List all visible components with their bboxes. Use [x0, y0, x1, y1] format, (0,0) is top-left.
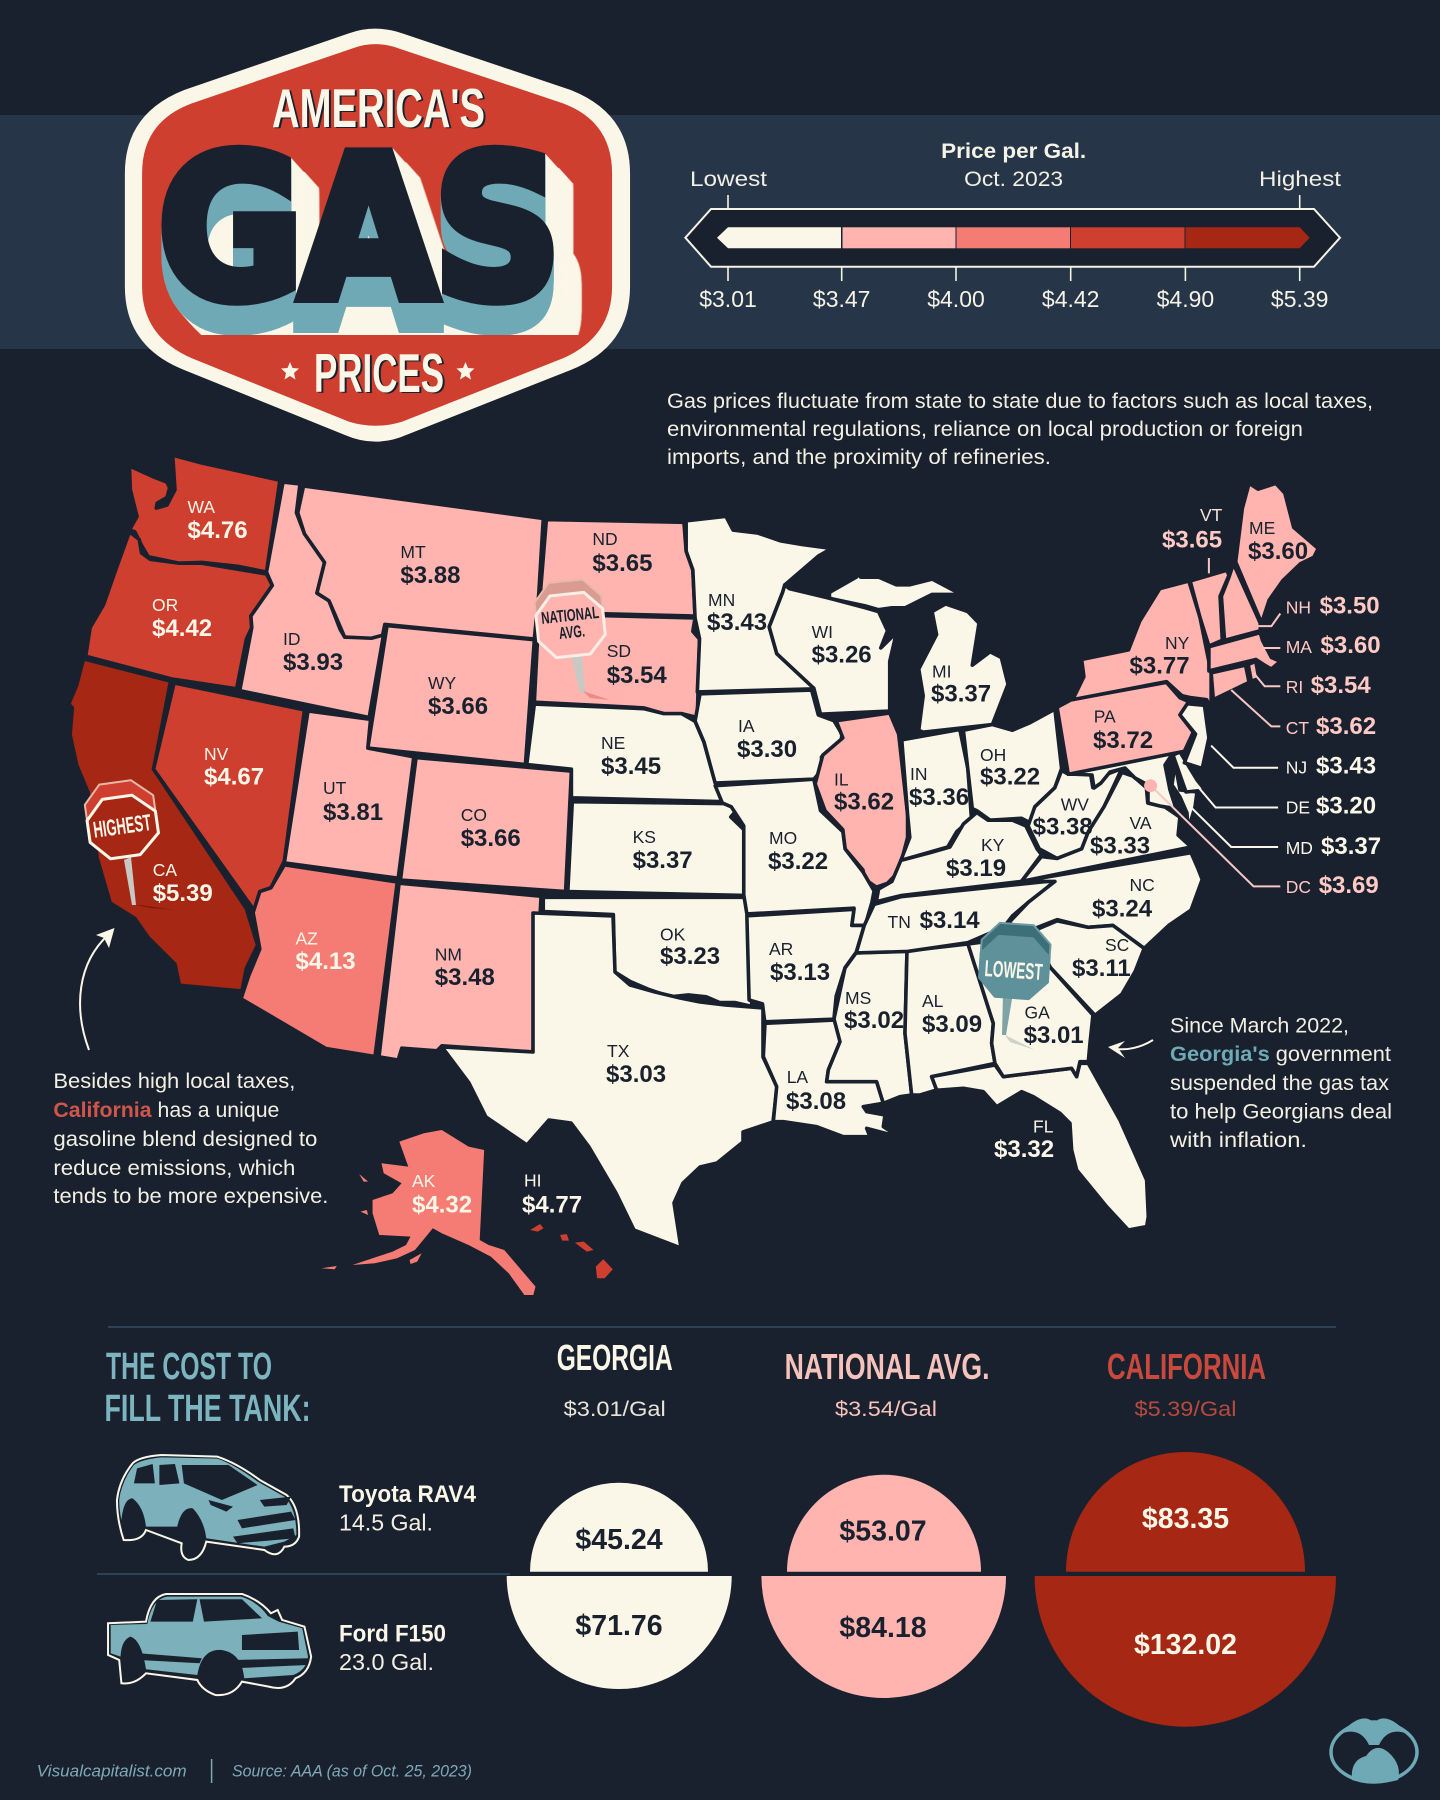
label: WI: $3.26	[812, 642, 872, 668]
label: WV: $3.38	[1033, 814, 1093, 841]
label: IL: IL	[834, 770, 849, 790]
label: SC: $3.11	[1072, 955, 1131, 982]
legend values: $4.90	[1157, 286, 1214, 312]
label: NV: $4.67	[204, 764, 264, 790]
label: OH	[980, 745, 1040, 791]
label: PA: $3.72	[1093, 727, 1153, 754]
label: AL: AL	[922, 991, 944, 1011]
state: Minnesota	[686, 516, 832, 692]
Georgia note text: suspended the gas tax	[1170, 1072, 1390, 1095]
column heading: National average: NATIONAL AVG.	[785, 1346, 990, 1387]
label: ME: ME	[1249, 518, 1275, 538]
label: SC: SC	[1105, 935, 1129, 955]
intro text: imports, and the proximity of refineries.	[667, 446, 1051, 469]
label: NH: NH	[1286, 598, 1311, 618]
label: OH: $3.22	[980, 764, 1040, 791]
column heading: California: $5.39/Gal	[1134, 1398, 1236, 1421]
icon: right star	[456, 362, 474, 380]
chart: Georgia semicircles	[507, 1483, 732, 1689]
label: MI	[931, 661, 991, 708]
label: CA: CA	[153, 860, 177, 880]
California note text: tends to be more expensive.	[53, 1185, 328, 1208]
label: MA: MA	[1286, 637, 1312, 657]
label: MD	[1286, 833, 1381, 860]
label: OK: OK	[660, 925, 686, 945]
label: MD: $3.37	[1321, 833, 1381, 860]
state: Florida	[932, 1063, 1148, 1230]
state: Iowa	[695, 690, 842, 783]
label: MA: $3.60	[1320, 632, 1381, 659]
Georgia note text	[1169, 1015, 1392, 1152]
label: WV	[1033, 795, 1093, 841]
state: Missouri	[715, 779, 874, 925]
state: Louisiana	[763, 1020, 898, 1137]
state: Montana	[298, 486, 543, 639]
label: VA: $3.33	[1090, 832, 1150, 860]
label: HI	[522, 1171, 582, 1219]
state: Arizona	[241, 865, 397, 1057]
label: IA: IA	[738, 716, 755, 736]
label: MO: MO	[769, 828, 797, 848]
text: Toyota RAV4 capacity: 14.5 Gal.	[339, 1510, 433, 1536]
label: KS: KS	[633, 827, 656, 847]
label: NH: $3.50	[1320, 592, 1380, 620]
label: WI: WI	[812, 622, 833, 642]
label: ND: $3.65	[592, 550, 652, 577]
chart: California semicircles: $83.35	[1142, 1503, 1229, 1535]
label: MN: $3.43	[707, 609, 767, 636]
label: OK	[660, 925, 720, 970]
label: TX	[606, 1041, 666, 1088]
label: MT: $3.88	[400, 562, 460, 589]
label: VT: $3.65	[1162, 527, 1222, 554]
label: HI: $4.77	[522, 1192, 582, 1219]
label: CT: CT	[1286, 718, 1309, 738]
label: WA: WA	[188, 497, 215, 517]
label: FL: $3.32	[994, 1136, 1054, 1163]
title: America's: AMERICA'S	[272, 77, 485, 139]
state: New York	[1073, 581, 1247, 715]
pin: lowest	[978, 922, 1052, 1050]
label: TN	[888, 907, 980, 934]
label: OK: $3.23	[660, 943, 720, 970]
label: DC	[1286, 872, 1379, 899]
label: AZ	[296, 928, 356, 975]
label: IL: $3.62	[834, 788, 894, 816]
state: Nevada	[154, 683, 304, 911]
label: GA	[1024, 1002, 1084, 1049]
title: Prices: PRICES	[314, 342, 444, 404]
label: MO: $3.22	[768, 848, 828, 875]
label: MA	[1286, 632, 1381, 659]
Georgia note text: to help Georgians deal	[1170, 1101, 1392, 1124]
arrow: points to California	[80, 928, 114, 1050]
legend values: $5.39	[1271, 286, 1328, 312]
label: NJ: $3.43	[1316, 752, 1376, 780]
chart: National average semicircles: $53.07	[839, 1516, 927, 1548]
label: AL: $3.09	[922, 1011, 982, 1038]
label: LA: LA	[787, 1067, 808, 1087]
state: Wisconsin	[769, 585, 896, 714]
label: KY: KY	[981, 835, 1005, 855]
state: Wyoming	[368, 626, 534, 765]
label: IN: $3.36	[909, 784, 969, 811]
map: state labels	[152, 497, 1381, 1219]
pin: highest: HIGHEST	[92, 809, 153, 843]
label: OR: $4.42	[152, 615, 212, 642]
text: Ford F150 capacity	[339, 1621, 446, 1675]
column heading: California	[1107, 1346, 1266, 1421]
state: Michigan	[829, 560, 1008, 732]
label: IA	[737, 716, 797, 763]
label: IA: $3.30	[737, 736, 797, 763]
label: NV	[204, 744, 264, 790]
text: Toyota RAV4 capacity	[339, 1481, 477, 1536]
label: ID	[283, 629, 343, 676]
state: New Hampshire	[1221, 564, 1260, 640]
label: OR: OR	[152, 595, 178, 615]
Georgia note text: Since March 2022,	[1170, 1015, 1349, 1038]
label: MT	[400, 542, 460, 589]
arrow: points to Georgia	[1108, 1040, 1153, 1058]
leader lines for northeast states	[1151, 558, 1280, 886]
section heading: the cost to fill the tank: THE COST TO	[106, 1346, 272, 1388]
legend date: Oct. 2023	[964, 168, 1063, 191]
icon: Visual Capitalist logo	[1331, 1718, 1417, 1783]
label: WV: WV	[1061, 795, 1089, 815]
Georgia note text: with inflation.	[1169, 1129, 1307, 1152]
state: Connecticut	[1211, 665, 1249, 700]
label: WA	[188, 497, 248, 544]
label: AR: $3.13	[770, 959, 830, 986]
map: state shapes	[69, 455, 1318, 1248]
column heading: Georgia: GEORGIA	[557, 1337, 673, 1378]
label: SD	[607, 641, 667, 689]
California note text: California has a unique	[53, 1099, 279, 1122]
label: ID: ID	[283, 629, 300, 649]
label: SD: $3.54	[607, 662, 667, 689]
label: IL	[834, 770, 894, 816]
label: MT: MT	[400, 542, 426, 562]
chart: National average semicircles	[761, 1475, 1006, 1698]
state: Texas	[442, 913, 777, 1248]
label: NM	[435, 944, 495, 991]
label: MN	[707, 590, 767, 636]
Georgia note text: Georgia's government	[1170, 1043, 1391, 1066]
intro text: Gas prices fluctuate from state to state due to factors such as local taxes,	[667, 390, 1373, 413]
state: North Dakota	[539, 520, 695, 616]
label: LA	[786, 1067, 846, 1115]
label: LA: $3.08	[786, 1088, 846, 1115]
footer: credit: Visualcapitalist.com	[37, 1762, 187, 1781]
state: Washington	[129, 455, 280, 572]
state: West Virginia	[1028, 769, 1122, 858]
legend values	[699, 286, 1328, 312]
state: Maine	[1236, 483, 1318, 623]
label: HI: HI	[524, 1171, 542, 1191]
label: MI: MI	[932, 661, 951, 681]
legend values: $4.42	[1042, 286, 1099, 312]
label: ME	[1248, 518, 1308, 565]
legend values: $3.01	[699, 286, 757, 312]
label: DE: DE	[1286, 798, 1310, 818]
text: Ford F150 capacity: 23.0 Gal.	[339, 1649, 434, 1675]
label: KY	[946, 835, 1006, 882]
label: NJ: NJ	[1286, 758, 1307, 778]
state: Rhode Island	[1248, 661, 1259, 681]
state: Hawaii	[530, 1224, 613, 1278]
chart: National average semicircles: $84.18	[839, 1612, 927, 1644]
legend frame	[685, 209, 1340, 267]
label: AK: $4.32	[412, 1192, 472, 1219]
label: MS: $3.02	[844, 1007, 904, 1034]
chart: California semicircles	[1035, 1452, 1336, 1727]
section heading: the cost to fill the tank: FILL THE TANK:	[104, 1388, 310, 1430]
state: Alabama	[905, 944, 995, 1095]
label: VT: VT	[1200, 505, 1223, 525]
label: FL: FL	[1033, 1117, 1054, 1137]
label: NY: NY	[1165, 633, 1190, 653]
label: AR: AR	[769, 939, 793, 959]
label: WI	[812, 622, 872, 668]
label: CO	[461, 805, 521, 852]
state: Delaware	[1173, 752, 1205, 792]
label: KY: $3.19	[946, 855, 1006, 882]
label: DC: DC	[1286, 877, 1311, 897]
pin: national average: AVG.	[558, 622, 586, 643]
label: AR	[769, 939, 830, 986]
label: FL	[994, 1117, 1054, 1163]
label: KS	[633, 827, 693, 874]
column heading: Georgia: $3.01/Gal	[564, 1398, 666, 1421]
state: Colorado	[400, 758, 571, 892]
state: Utah	[284, 711, 414, 878]
California note text	[53, 1070, 328, 1208]
label: ND: ND	[592, 529, 618, 549]
callout: California note	[53, 928, 328, 1208]
state: Kentucky	[876, 813, 1041, 902]
icon: DC marker	[1144, 779, 1157, 792]
label: CA: $5.39	[153, 880, 213, 907]
label: NJ	[1286, 752, 1376, 780]
label: NC	[1092, 875, 1155, 923]
label: ND	[592, 529, 652, 577]
label: DC: $3.69	[1319, 872, 1379, 899]
state: Massachusetts	[1209, 633, 1280, 671]
column heading: California: CALIFORNIA	[1107, 1346, 1266, 1387]
icon: left star	[281, 362, 299, 380]
state: Ohio	[963, 709, 1062, 824]
label: SD: SD	[607, 641, 631, 661]
state: New Mexico	[379, 883, 541, 1060]
label: VT	[1162, 505, 1223, 554]
pin: lowest: LOWEST	[984, 955, 1043, 985]
legend values: $3.47	[813, 286, 870, 312]
label: MO	[768, 828, 828, 875]
title: GAS lettering: GAS	[158, 115, 558, 344]
label: MI: $3.37	[931, 680, 991, 708]
legend lowest label: Lowest	[690, 168, 767, 191]
label: DE	[1286, 793, 1376, 820]
label: UT: UT	[323, 778, 347, 798]
footer: source: Source: AAA (as of Oct. 25, 2023)	[232, 1762, 472, 1781]
pin: national average	[533, 578, 610, 700]
state: Virginia	[1021, 772, 1191, 881]
label: TN: TN	[888, 912, 911, 932]
label: MS	[844, 988, 904, 1034]
pin: national average: NATIONAL	[540, 603, 600, 628]
title badge	[125, 29, 630, 442]
label: NM: $3.48	[435, 964, 495, 991]
label: CT	[1286, 713, 1376, 740]
state: Oregon	[86, 532, 272, 689]
label: NH	[1286, 592, 1380, 620]
label: GA: GA	[1024, 1002, 1050, 1022]
label: KS: $3.37	[633, 847, 693, 874]
label: NC: $3.24	[1092, 896, 1153, 923]
chart: Georgia semicircles: $45.24	[575, 1524, 663, 1556]
label: TX: TX	[607, 1041, 630, 1061]
label: NY	[1130, 633, 1190, 680]
pin: highest	[82, 777, 175, 910]
label: NC: NC	[1130, 875, 1155, 895]
label: VA: VA	[1130, 813, 1152, 833]
label: NE	[601, 733, 661, 780]
legend colour bar	[717, 227, 1310, 248]
label: AZ: AZ	[296, 928, 318, 948]
label: RI: $3.54	[1311, 672, 1371, 699]
label: RI: RI	[1286, 677, 1303, 697]
label: OH: OH	[980, 745, 1006, 765]
state: Vermont	[1190, 570, 1229, 646]
label: ID: $3.93	[283, 649, 343, 676]
California note text: gasoline blend designed to	[53, 1128, 317, 1151]
state: Georgia	[968, 938, 1093, 1077]
state: Idaho	[240, 482, 385, 717]
state: Maryland	[1069, 753, 1197, 830]
state: Oklahoma	[543, 897, 752, 1006]
icon: Ford F150	[108, 1594, 311, 1695]
label: ME: $3.60	[1248, 538, 1308, 565]
label: MN: MN	[708, 590, 735, 610]
text: Toyota RAV4 capacity: Toyota RAV4	[339, 1481, 477, 1508]
label: TN: $3.14	[920, 907, 980, 934]
state: New Jersey	[1180, 703, 1209, 769]
label: MD: MD	[1286, 838, 1313, 858]
California note text: Besides high local taxes,	[53, 1070, 295, 1093]
label: UT: $3.81	[323, 799, 383, 826]
intro text: environmental regulations, reliance on local production or foreign	[667, 418, 1303, 441]
state: South Carolina	[1033, 921, 1144, 1015]
icon: Toyota RAV4	[117, 1455, 299, 1560]
label: AK	[412, 1171, 472, 1219]
section heading: the cost to fill the tank	[104, 1346, 310, 1430]
state: North Carolina	[1008, 853, 1202, 948]
label: SC	[1072, 935, 1131, 982]
header band	[0, 115, 1440, 349]
label: VA	[1090, 813, 1152, 860]
label: TX: $3.03	[606, 1061, 666, 1088]
label: CT: $3.62	[1316, 713, 1376, 740]
state: Tennessee	[856, 881, 1055, 953]
California note text: reduce emissions, which	[53, 1157, 295, 1180]
state: Alaska	[321, 1130, 536, 1295]
state: California	[69, 659, 258, 991]
intro text	[667, 390, 1373, 469]
state: Nebraska	[527, 704, 724, 802]
column heading: Georgia	[557, 1337, 673, 1421]
state: Arkansas	[747, 909, 864, 1022]
label: OR	[152, 595, 212, 642]
label: WY: WY	[428, 673, 457, 693]
label: PA	[1093, 707, 1153, 754]
state: Illinois	[815, 713, 908, 887]
state: Kansas	[568, 802, 745, 895]
label: WY	[428, 673, 488, 720]
label: CA	[153, 860, 213, 907]
label: PA: PA	[1094, 707, 1116, 727]
state: South Dakota	[534, 614, 700, 717]
label: NM: NM	[435, 944, 462, 964]
chart: California semicircles: $132.02	[1134, 1629, 1237, 1661]
label: NE: $3.45	[601, 753, 661, 780]
label: IN: IN	[910, 764, 928, 784]
label: AZ: $4.13	[296, 948, 356, 975]
state: Mississippi	[827, 951, 912, 1103]
label: CO: $3.66	[461, 825, 521, 852]
text: Ford F150 capacity: Ford F150	[339, 1621, 446, 1648]
label: WA: $4.76	[188, 517, 248, 544]
label: CO: CO	[461, 805, 487, 825]
label: MS: MS	[845, 988, 871, 1008]
chart: Georgia semicircles: $71.76	[575, 1610, 663, 1642]
label: NE: NE	[601, 733, 625, 753]
callout: Georgia note	[1108, 1015, 1392, 1152]
legend: price scale	[685, 140, 1341, 312]
column heading: National average: $3.54/Gal	[835, 1398, 937, 1421]
state: Pennsylvania	[1057, 682, 1193, 774]
label: NV: NV	[204, 744, 229, 764]
legend highest label: Highest	[1259, 168, 1341, 191]
legend values: $4.00	[927, 286, 985, 312]
label: WY: $3.66	[428, 693, 488, 720]
label: NY: $3.77	[1130, 653, 1190, 680]
legend heading: Price per Gal.	[941, 140, 1086, 163]
label: GA: $3.01	[1024, 1022, 1084, 1049]
label: IN	[909, 764, 969, 811]
label: DE: $3.20	[1316, 793, 1376, 820]
label: UT	[323, 778, 383, 826]
state: Indiana	[901, 729, 971, 860]
label: AK: AK	[412, 1171, 436, 1191]
column heading: National average	[785, 1346, 990, 1421]
label: AL	[922, 991, 982, 1038]
